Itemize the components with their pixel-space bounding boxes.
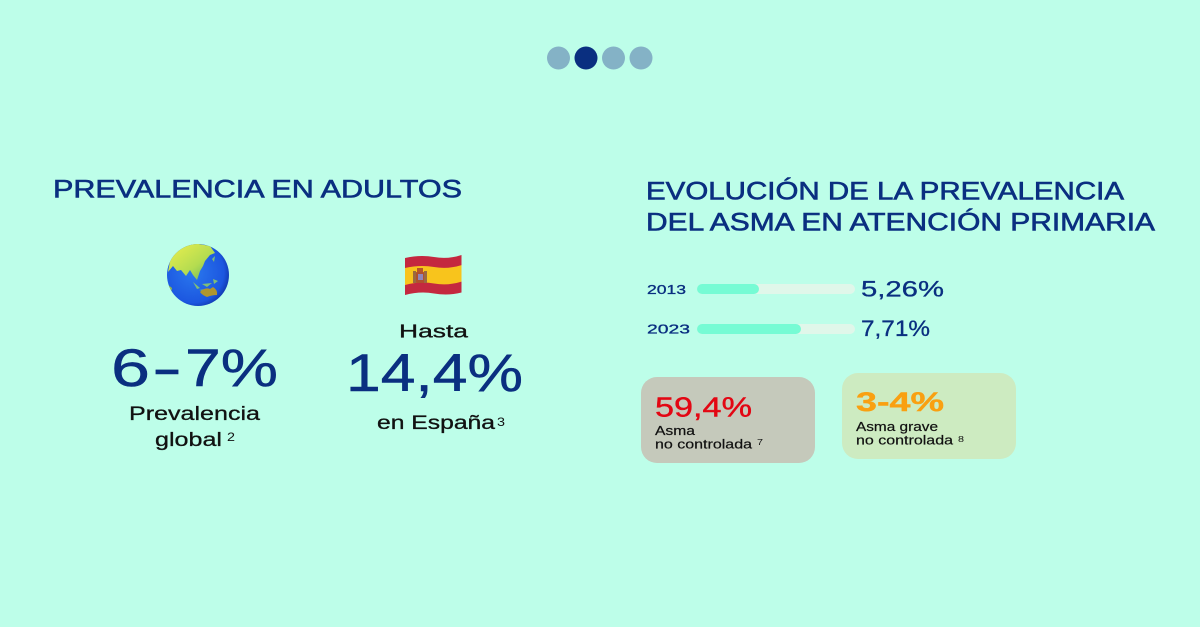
card: asma grave no controlada: Asma grave [856, 419, 938, 434]
stat: global prevalence: global [155, 430, 222, 451]
pagination dots [547, 46, 652, 70]
heading: evolucion: DEL ASMA EN ATENCIÓN PRIMARIA [646, 208, 1155, 236]
heading: evolucion: EVOLUCIÓN DE LA PREVALENCIA [646, 176, 1124, 206]
stat: global prevalence [111, 339, 278, 451]
card: asma grave no controlada: 3-4% [856, 387, 944, 417]
heading: prevalencia en adultos: PREVALENCIA EN ADULTOS [53, 176, 462, 204]
card: asma grave no controlada: 8 [958, 435, 965, 444]
card: asma grave no controlada [842, 373, 1016, 459]
stat: Spain prevalence: 3 [497, 415, 505, 429]
card: asma no controlada: no controlada [655, 436, 753, 452]
stat: global prevalence: 6 [111, 339, 150, 398]
bar 2023: 7,71% [861, 316, 930, 341]
stat: Spain prevalence: en España [377, 413, 496, 434]
stat: Spain prevalence [346, 322, 523, 434]
stat: global prevalence: 2 [227, 430, 235, 444]
icon: Spain flag [405, 255, 462, 295]
card: asma grave no controlada: no controlada [856, 432, 954, 448]
bar 2013: 2013 [647, 282, 686, 297]
card: asma no controlada: 59,4% [655, 392, 752, 422]
icon: globe [167, 243, 229, 306]
card: asma no controlada: Asma [655, 423, 696, 438]
bar 2013 [647, 276, 944, 302]
stat: global prevalence: - [152, 339, 182, 398]
heading: evolucion [646, 176, 1155, 236]
bar 2023: 2023 [647, 322, 690, 336]
stat: Spain prevalence: 14,4% [346, 344, 523, 403]
stat: Spain prevalence: Hasta [399, 322, 469, 342]
stat: global prevalence: Prevalencia [129, 404, 261, 425]
card: asma no controlada [641, 377, 815, 463]
stat: global prevalence: 7% [185, 339, 278, 398]
bar 2013: 5,26% [861, 276, 944, 302]
card: asma no controlada: 7 [757, 438, 764, 447]
bar 2023 [647, 316, 930, 341]
